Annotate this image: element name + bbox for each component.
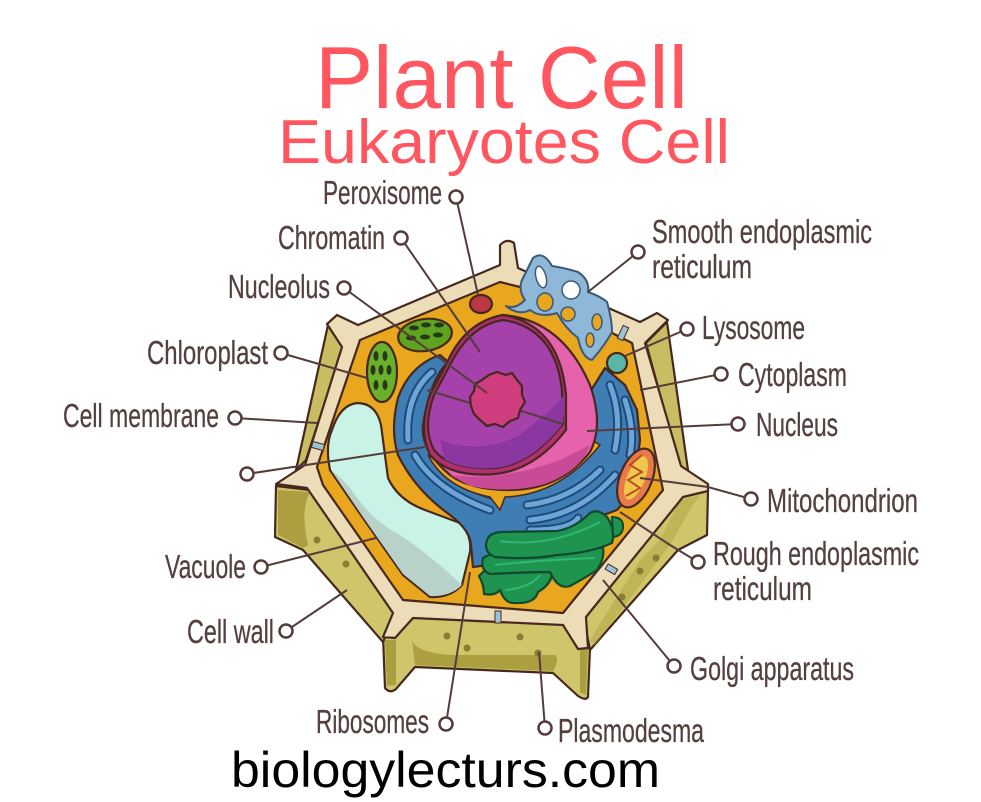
Golgi apparatus (479, 511, 623, 603)
wall pits (314, 536, 660, 656)
chloroplasts (367, 315, 454, 402)
labels: Chloroplast (147, 334, 268, 371)
labels: Vacuole (165, 548, 246, 585)
wall shadows (412, 640, 557, 671)
labels: Chromatin (278, 219, 385, 256)
labels: Cytoplasm (738, 356, 847, 393)
cell diagram (275, 241, 708, 699)
vacuole (328, 403, 470, 597)
labels: reticulum (713, 570, 812, 607)
labels: Peroxisome (323, 174, 442, 211)
lysosome (607, 353, 627, 373)
labels (63, 174, 919, 749)
labels: Nucleus (756, 406, 838, 443)
labels: reticulum (652, 248, 752, 285)
mitochondrion (610, 443, 662, 513)
smooth endoplasmic reticulum (506, 255, 612, 360)
labels: Plasmodesma (558, 712, 704, 749)
peroxisome (470, 295, 492, 313)
label markers (228, 190, 758, 734)
subtitle: Eukaryotes Cell (278, 108, 730, 177)
labels: Mitochondrion (767, 482, 918, 519)
cell wall beige frame (276, 241, 708, 649)
nucleolus (470, 372, 525, 427)
labels: Ribosomes (316, 703, 429, 740)
labels: Cell wall (187, 613, 274, 650)
labels: Cell membrane (63, 397, 219, 434)
labels: Smooth endoplasmic (652, 213, 872, 250)
cytoplasm (317, 282, 663, 613)
cell wall olive panels (275, 322, 708, 699)
nucleus (423, 315, 597, 490)
rough endoplasmic reticulum (394, 355, 640, 567)
title: Plant Cell (315, 28, 688, 127)
plasmodesmata (311, 325, 629, 623)
website footer: biologylecturs.com (231, 742, 660, 798)
nuclear gap in cytoplasm (428, 440, 600, 510)
labels: Nucleolus (228, 268, 330, 305)
labels: Lysosome (702, 309, 805, 346)
labels: Golgi apparatus (690, 650, 854, 687)
leader lines (235, 197, 751, 728)
